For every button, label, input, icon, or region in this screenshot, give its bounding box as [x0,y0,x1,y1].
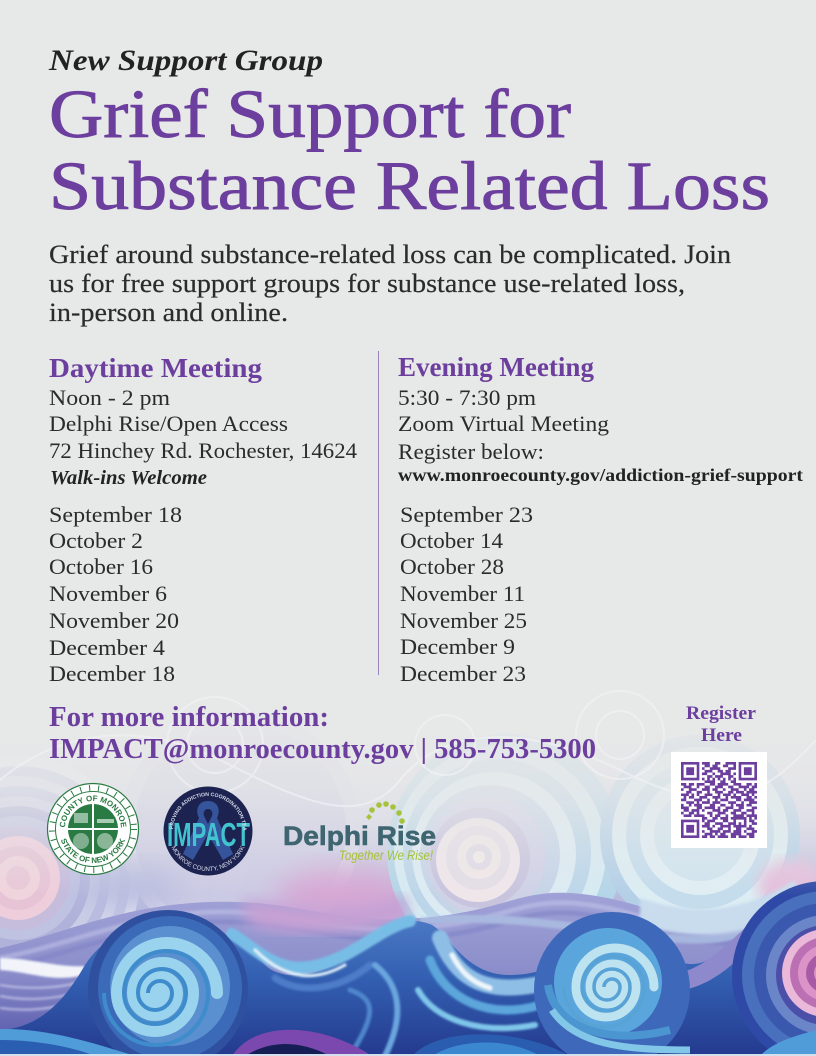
daytime details: Walk-ins Welcome [50,467,207,489]
register here label: Register [686,703,757,724]
intro paragraph: us for free support groups for substance use-related loss, [49,268,685,298]
evening dates: October 28 [400,554,504,579]
swirl pink [732,881,816,1056]
evening details: 5:30 - 7:30 pm [398,385,536,410]
lower purple pool [232,1030,372,1056]
column divider [378,351,379,675]
daytime dates: December 4 [49,635,165,660]
deep wave striations [232,921,540,1056]
register here label: Here [701,725,742,746]
daytime dates: November 20 [49,608,179,633]
evening dates [400,502,533,686]
daytime dates: September 18 [49,502,182,527]
logo: IMPACT: IMPACT [167,816,250,853]
heading: evening: Evening Meeting [398,352,594,382]
logo: Delphi Rise [283,801,436,863]
periwinkle wedge, right of swirl [650,925,770,992]
evening dates: December 9 [400,634,515,659]
daytime details: Noon - 2 pm [49,385,170,410]
daytime dates: October 2 [49,528,143,553]
swirl middle-left lilac with pink [80,710,415,950]
logo: Delphi Rise: Together We Rise! [339,847,433,863]
background art: swirling waves [0,690,816,1056]
evening details: www.monroecounty.gov/addiction-grief-support [398,465,803,485]
deep wave [0,912,816,1056]
soft fade over art top [0,690,816,895]
logo: IMPACT [164,786,252,876]
evening dates: September 23 [400,502,533,527]
QR code [671,752,767,848]
title: Substance Related Loss [49,148,770,224]
intro paragraph: in-person and online. [49,297,288,327]
logo: County of Monroe seal [46,782,140,876]
eyebrow: New Support Group: New Support Group [48,44,323,77]
pale blue ribbon, right [640,880,800,935]
title: Grief Support for [49,76,571,152]
contact information: For more information: [49,702,329,733]
evening dates: November 11 [400,581,525,606]
swirl left [88,910,248,1056]
daytime dates: October 16 [49,554,153,579]
daytime details: 72 Hinchey Rd. Rochester, 14624 [49,438,357,463]
mid wave [0,885,816,1056]
evening dates: November 25 [400,608,527,633]
evening dates: December 23 [400,661,526,686]
daytime dates: November 6 [49,581,167,606]
contact information [49,702,596,765]
logo: IMPACT: IMPROVING ADDICTION COORDINATION TEAM [170,792,247,831]
swirl C, right pale blue [600,735,816,935]
contact information: IMPACT@monroecounty.gov | 585-753-5300 [49,734,596,765]
logo: County of Monroe seal: STATE OF NEW YORK [61,838,126,864]
swirl A, left pale [0,756,140,1000]
panel: evening meeting [398,352,803,686]
evening dates: October 14 [400,528,503,553]
lower-left blue sweep [0,1029,135,1056]
heading: daytime: Daytime Meeting [49,353,263,383]
swirl B, large pale blue [387,734,623,970]
daytime dates: December 18 [49,661,175,686]
evening details: Register below: [398,439,544,464]
daytime dates [49,502,182,686]
daytime details: Delphi Rise/Open Access [49,411,288,436]
logo: County of Monroe seal: COUNTY OF MONROE [60,795,126,828]
logo: Delphi Rise: Delphi Rise [283,821,436,851]
faint swirl lines in the fade [0,691,816,806]
lower-right swirl [412,1034,570,1056]
intro paragraph: Grief around substance-related loss can be complicated. Join [49,239,731,269]
pink glow above blue wave [240,895,408,933]
daytime details [49,385,357,489]
mid wave striations [0,903,790,968]
intro paragraph [49,239,731,327]
title [49,76,770,224]
swirl right [534,912,690,1056]
register here label [686,703,757,746]
evening details: Zoom Virtual Meeting [398,411,609,436]
panel: daytime meeting [49,353,357,686]
evening details [398,385,803,485]
left lilac striations [0,958,85,1010]
logo: IMPACT: MONROE COUNTY, NEW YORK [172,846,244,871]
